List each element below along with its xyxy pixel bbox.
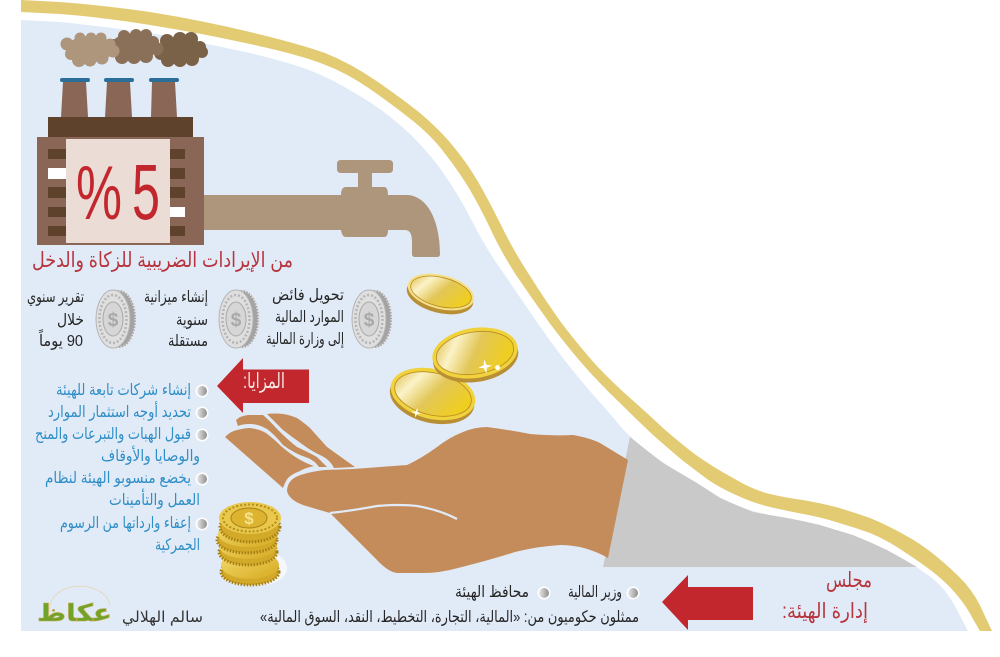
text: annual report: خلال — [57, 312, 84, 329]
label: benefits: المزايا: — [243, 370, 285, 393]
text: board members: وزير المالية — [568, 584, 622, 602]
palm crease — [330, 505, 457, 519]
icon: silver coin 1 — [352, 290, 392, 348]
text: annual report: 90 يوماً — [38, 328, 83, 351]
icon: gray sleeve — [603, 437, 917, 567]
text: transfer surplus — [266, 287, 344, 349]
arrow: benefits — [217, 358, 309, 413]
icon: falling gold coin 1 — [403, 267, 478, 321]
text: annual report: تقرير سنوي — [27, 289, 84, 307]
icon: gold coin stack: $ — [244, 509, 254, 528]
list: benefits bullets: العمل والتأمينات — [109, 488, 200, 510]
icon: silver coin 1: $ — [364, 310, 375, 331]
credit: author: سالم الهلالي — [122, 609, 203, 627]
list: benefits bullets: تحديد أوجه استثمار الموارد — [48, 401, 191, 422]
icon: falling gold coin 2 — [429, 322, 522, 388]
text: board members: ممثلون حكوميون من: «المالية، التجارة، التخطيط، النقد، السوق المالية» — [260, 609, 639, 627]
list: benefits bullets: قبول الهبات والتبرعات والمنح — [35, 426, 191, 444]
list: benefits bullets — [35, 382, 208, 555]
icon: factory — [37, 78, 204, 245]
logo: Okaz — [37, 586, 112, 627]
heading: board of directors: إدارة الهيئة: — [782, 600, 868, 624]
list: benefits bullets: والوصايا والأوقاف — [101, 445, 200, 466]
text: independent budget — [144, 289, 208, 350]
text: independent budget: مستقلة — [168, 333, 208, 350]
list: benefits bullets: يخضع منسوبو الهيئة لنظام — [45, 470, 191, 488]
icon: silver coin 2: $ — [231, 310, 242, 331]
list: benefits bullets: إنشاء شركات تابعة للهيئة — [56, 382, 191, 400]
text: transfer surplus: إلى وزارة المالية — [266, 331, 344, 349]
icon: gold coin stack — [217, 502, 287, 585]
text: independent budget: إنشاء ميزانية — [144, 289, 208, 307]
arrow: board — [662, 575, 753, 630]
text: board members: محافظ الهيئة — [455, 584, 529, 602]
text: independent budget: سنوية — [176, 312, 208, 330]
logo: Okaz: عكاظ — [37, 600, 112, 627]
icon: silver coin 3: $ — [108, 310, 119, 331]
text: transfer surplus: تحويل فائض — [272, 287, 344, 305]
heading: revenue share: من الإيرادات الضريبية للزكاة والدخل — [32, 249, 293, 272]
icon: faucet pipe — [204, 160, 440, 257]
big number: 5%: % — [76, 151, 122, 236]
icon: open hand — [225, 414, 628, 573]
text: annual report — [27, 289, 84, 351]
heading: board of directors: مجلس — [826, 569, 872, 592]
text: board members — [260, 584, 640, 627]
icon: falling gold coin 3 — [385, 360, 481, 432]
list: benefits bullets: إعفاء وارداتها من الرسوم — [60, 515, 191, 533]
big number: 5%: 5 — [132, 147, 160, 236]
icon: factory smoke — [60, 29, 208, 67]
list: benefits bullets: الجمركية — [155, 537, 200, 555]
text: transfer surplus: الموارد المالية — [275, 309, 344, 327]
icon: silver coin 2 — [219, 290, 259, 348]
icon: silver coin 3 — [96, 290, 136, 348]
heading: board of directors — [782, 569, 872, 624]
